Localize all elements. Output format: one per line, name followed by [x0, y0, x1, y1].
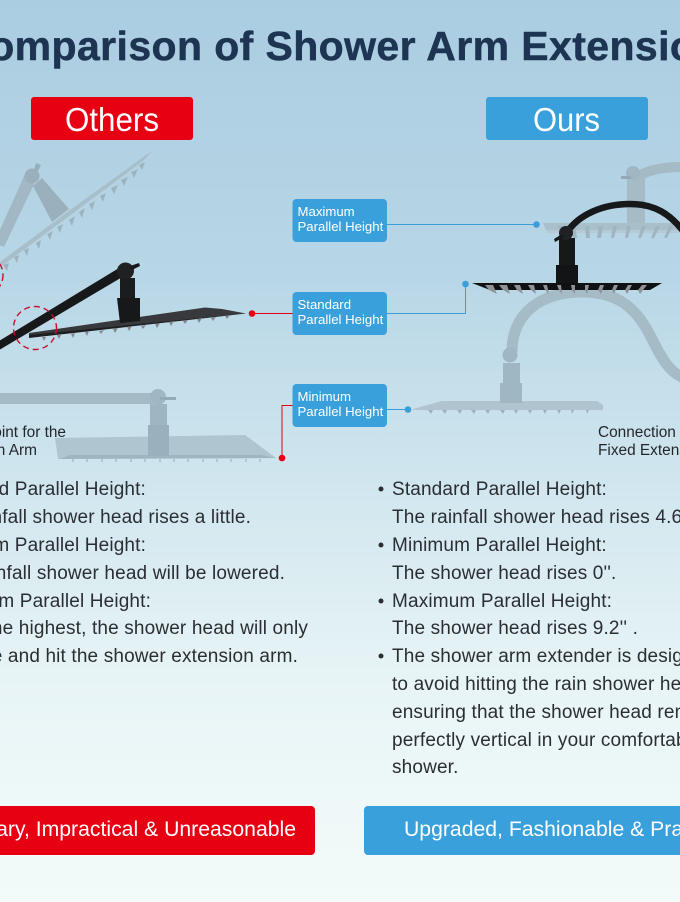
illustration: ours, raised ghost shower head — [543, 166, 680, 238]
highlight: dashed red circles on the others arm — [0, 254, 56, 350]
label: maximum parallel height — [292, 199, 387, 242]
callout dot: red standard — [249, 310, 255, 317]
callout dot: blue minimum — [405, 406, 411, 413]
label: maximum parallel height: Maximum — [298, 204, 355, 219]
label: minimum parallel height: Minimum — [298, 389, 351, 404]
text block: ours description: The shower head rises 9.2'' . — [392, 618, 638, 639]
illustration: others, lowered ghost shower head — [0, 389, 276, 462]
text block: ours description: Minimum Parallel Height: — [392, 535, 607, 556]
caption: others connection point — [0, 424, 66, 459]
label: maximum parallel height: Parallel Height — [298, 219, 384, 234]
callout dot: blue standard — [462, 281, 469, 287]
callout line: red connectors — [252, 314, 293, 458]
illustration: others, black shower head at standard height — [0, 262, 246, 353]
callout dot: red minimum — [279, 455, 285, 461]
badge: Others — [31, 97, 193, 140]
text block: ours description — [378, 479, 680, 778]
text block: others description — [0, 479, 308, 667]
illustration: ours, lower ghost arch arm — [512, 292, 680, 378]
badge: Ours — [486, 97, 648, 140]
banner: others verdict — [0, 806, 315, 855]
label: standard parallel height: Parallel Height — [298, 312, 384, 327]
caption: ours connection point — [598, 424, 680, 459]
illustration: ours, black arch arm and shower head — [472, 204, 680, 294]
label: standard parallel height: Standard — [298, 297, 351, 312]
text block: ours description: shower. — [392, 757, 459, 778]
banner: ours verdict — [364, 806, 680, 855]
callout line: blue connectors — [387, 224, 536, 410]
illustration: ours, lowered ghost shower head — [413, 348, 603, 414]
text block: ours description: The shower head rises 0''. — [392, 563, 616, 584]
label: minimum parallel height: Parallel Height — [298, 404, 384, 419]
badge: Others: Others — [65, 102, 159, 139]
text block: ours description: Maximum Parallel Height: — [392, 591, 612, 612]
badge: Ours: Ours — [533, 102, 600, 139]
label: standard parallel height — [292, 292, 387, 335]
callout dot: blue maximum — [533, 221, 540, 228]
illustration: others, raised ghost shower head — [0, 150, 153, 271]
text block: ours description: Standard Parallel Height: — [392, 479, 607, 500]
label: minimum parallel height — [292, 384, 387, 427]
